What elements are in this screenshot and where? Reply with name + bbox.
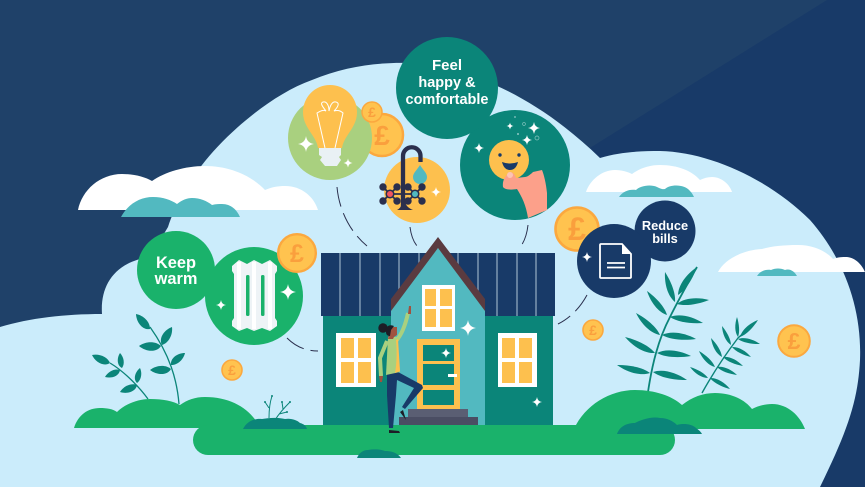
connector: radiator (287, 338, 318, 351)
lawn (193, 425, 675, 455)
circle: feel happy and comfortable: happy & (418, 75, 476, 91)
cloud: upper left (78, 166, 318, 217)
circle: keep warm: Keep (156, 254, 196, 272)
icon: radiator (205, 247, 303, 345)
plant: left (90, 312, 187, 404)
bush: right green (574, 390, 805, 429)
icon: light bulb (288, 85, 372, 180)
person (378, 306, 423, 433)
coin: centre right small (583, 320, 603, 340)
coin: far right: £ (788, 328, 801, 354)
head (388, 327, 397, 339)
coin: behind bulb (361, 114, 403, 156)
cloud: right (718, 245, 865, 276)
connector: bill (558, 295, 587, 324)
torso (386, 337, 400, 375)
sparkles on house (441, 320, 542, 407)
cloud: upper right (586, 165, 732, 197)
hand (503, 170, 547, 218)
circle: reduce bills: bills (652, 231, 678, 246)
bush: left green (74, 397, 260, 428)
circle: reduce bills (634, 200, 696, 262)
upper window (422, 285, 455, 331)
connector: bulb (337, 187, 367, 246)
bush: lawn edge (357, 449, 401, 458)
roof panels (321, 253, 555, 316)
coin: bill (556, 208, 598, 250)
coin: small above bulb (362, 102, 382, 122)
house (321, 237, 555, 425)
connector: smile (521, 225, 528, 246)
left arm (380, 341, 387, 376)
coin: behind bulb: £ (374, 120, 390, 151)
plant: right small (689, 317, 761, 393)
bush: right teal (617, 417, 702, 434)
gable trim (391, 237, 485, 311)
door (417, 339, 460, 409)
coin: left small: £ (228, 362, 236, 378)
plant: right large (616, 265, 709, 392)
icon: bill document (577, 224, 651, 298)
shoes (389, 410, 406, 433)
raised arm (396, 313, 408, 341)
steps (399, 409, 478, 425)
circle: smile (460, 110, 570, 220)
coin: small above bulb: £ (368, 104, 376, 120)
circle: keep warm (137, 231, 215, 309)
gable wall (391, 248, 485, 425)
circle: reduce bills: Reduce (642, 218, 688, 233)
coin: centre right small: £ (589, 322, 597, 338)
left window (336, 333, 376, 387)
connector: tap (410, 227, 417, 246)
coin: left small (222, 360, 242, 380)
coin: bill: £ (568, 211, 586, 247)
circle: keep warm: warm (154, 270, 197, 288)
legs (387, 372, 423, 428)
coin: far right (778, 325, 810, 357)
house body (323, 316, 553, 425)
smiley (489, 140, 529, 180)
coin: radiator (278, 234, 316, 272)
circle: feel happy and comfortable (396, 37, 498, 139)
coin: radiator: £ (290, 240, 304, 268)
icon: tap and valves (379, 147, 450, 223)
circle: feel happy and comfortable: comfortable (406, 92, 488, 108)
circle: feel happy and comfortable: Feel (432, 57, 462, 74)
twig shrub (243, 395, 307, 429)
right window (498, 333, 537, 387)
